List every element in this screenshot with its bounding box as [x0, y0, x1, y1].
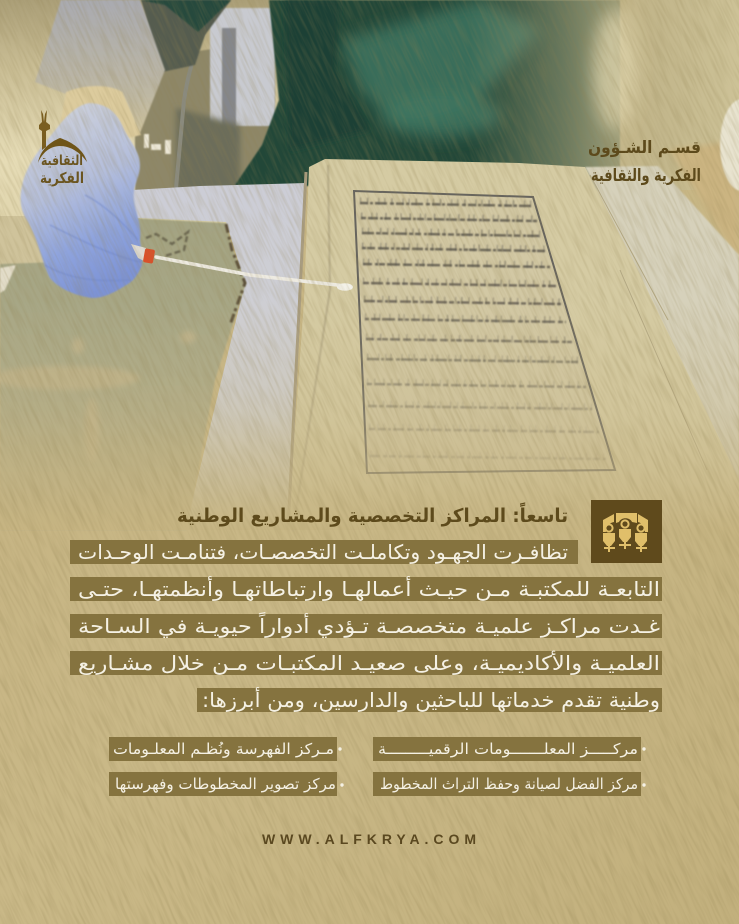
line 4 highlight: [70, 651, 662, 675]
green shoulder: [140, 0, 231, 32]
figure 2: [619, 520, 631, 549]
logo calligraphy: [40, 153, 84, 187]
inner spine fold: [293, 165, 330, 530]
shirt fade into the cream panel: [470, 0, 739, 190]
tan table corner: [670, 140, 739, 260]
chair tube: [176, 27, 207, 188]
item: digital information centre: مركـــــز المعلـــــــومات الرقميـــــــــة: [378, 740, 638, 758]
green shirt: [235, 0, 620, 190]
photo: conservator treating a manuscript: [0, 0, 739, 530]
department line 1: قسـم الشـؤون: [588, 138, 701, 158]
list of centres: [109, 737, 646, 796]
logo calligraphy: الفكرية: [40, 169, 84, 187]
line 4 text: العلميـة والأكاديميـة، وعلى صعيـد المكتبـات مـن خلال مشـاريع: [78, 651, 660, 675]
open manuscript book: [288, 159, 739, 530]
swab: [131, 244, 353, 291]
blue-grey table sheet: [132, 183, 306, 530]
dark lower wall: [176, 108, 240, 190]
cream highlight right of shirt: [593, 10, 637, 130]
minaret: [39, 110, 50, 150]
centre arch panel: [616, 513, 637, 523]
grey wall panel: [210, 8, 275, 126]
left arch panel: [603, 514, 614, 532]
figure 1: [603, 524, 615, 552]
glove finger creases: [45, 195, 140, 281]
line 2 text: التابعـة للمكتبـة مـن حيـث أعمالهـا وارتباطاتهـا وأنظمتهـا، حتـى: [78, 576, 660, 601]
lower-left cream ledge: [0, 216, 140, 271]
line 3 text: غـدت مراكـز علميـة متخصصـة تـؤدي أدواراً حيويـة في السـاحة: [78, 612, 660, 639]
glove: [21, 103, 142, 298]
section icon: three figures: [591, 500, 662, 563]
paper ink marks: [146, 232, 188, 256]
line 1 highlight: [70, 540, 578, 564]
book spine shadow: [288, 172, 306, 530]
left olive paper: [0, 218, 246, 530]
line 1 text: تظافـرت الجهـود وتكاملـت التخصصـات، فتنامـت الوحـدات: [78, 540, 568, 564]
glass bottle highlights: [144, 134, 171, 154]
line 5 text: وطنية تقدم خدماتها للباحثين والدارسين، ومن أبرزها:: [202, 687, 660, 712]
figure 3: [635, 524, 647, 552]
shirt shadow fold: [285, 0, 370, 150]
dark backdrop under the arm: [135, 40, 275, 192]
line 2 highlight: [70, 577, 662, 601]
wrist: [60, 86, 141, 140]
right arch panel: [638, 514, 648, 532]
fade of the photo into the sand: [0, 300, 739, 530]
wall stripe: [222, 28, 236, 163]
section heading: تاسعاً: المراكز التخصصية والمشاريع الوطنية: [177, 502, 568, 527]
wall behind the scene: [0, 0, 280, 225]
logo: [38, 110, 87, 187]
line 5 highlight: [197, 688, 662, 712]
department name: [588, 138, 701, 186]
item: digital information centre: [373, 737, 646, 761]
body paragraph: [70, 540, 662, 712]
department line 2: الفكرية والثقافية: [591, 166, 701, 186]
manuscript text frame: [354, 191, 615, 473]
logo calligraphy: الثقافية: [41, 153, 83, 169]
paper stains: [0, 331, 196, 462]
paper tear: [0, 265, 16, 293]
page margin lines: [590, 175, 707, 470]
sleeve: [35, 0, 165, 133]
item: cataloguing centre: مـركز الفهرسة ونُظـم المعلـومات: [113, 740, 334, 758]
right-hand loose cloth: [585, 166, 739, 530]
website: WWW.ALFKRYA.COM: [262, 831, 476, 847]
item: imaging centre: مركز تصوير المخطوطات وفهرستها: [115, 775, 336, 793]
shoulder strap: [141, 0, 231, 72]
item: cataloguing centre: [109, 737, 342, 761]
line 3 highlight: [70, 614, 662, 638]
shirt highlights: [340, 0, 540, 137]
item: Al-Fadl centre: مركز الفضل لصيانة وحفظ التراث المخطوط: [380, 775, 638, 793]
manuscript written lines: [360, 201, 607, 459]
torn paper edge: [226, 224, 245, 325]
white cloth at right: [720, 99, 739, 191]
dome: [38, 138, 87, 163]
